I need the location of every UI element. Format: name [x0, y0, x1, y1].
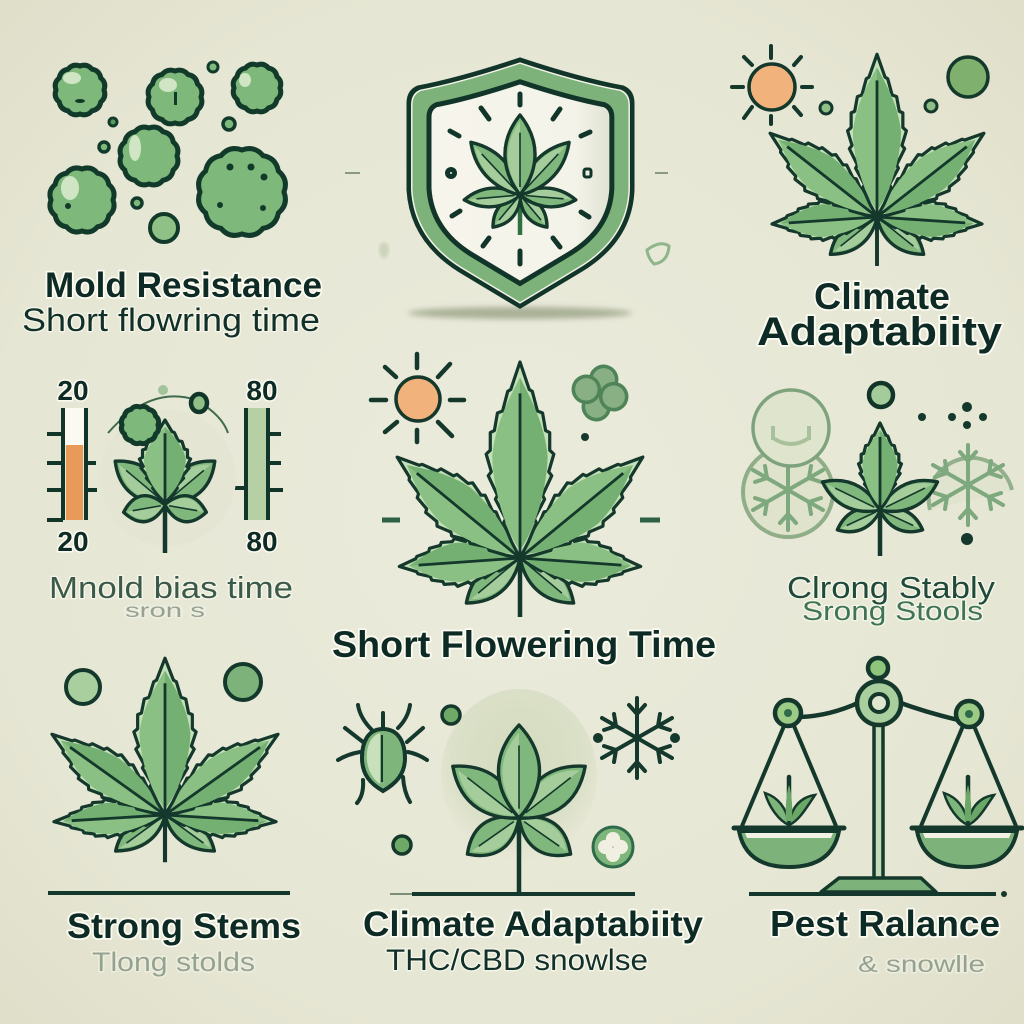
faint caption: Tlong stolds: [92, 947, 255, 977]
heading: Short Flowering Time: [332, 624, 716, 665]
subheading: Srong Stools: [802, 596, 983, 626]
icon: cannabis leaf: [36, 658, 294, 862]
side marks: [382, 518, 660, 522]
ground line: [48, 891, 290, 895]
subheading: Short flowring time: [22, 302, 320, 338]
heading: Climate: [814, 276, 950, 317]
side marks: [345, 173, 669, 264]
icon: sun: [732, 46, 812, 124]
panel: temperature: [47, 375, 293, 622]
panel: short flowering time: [332, 354, 716, 665]
chart: left thermometer: 20: [57, 526, 89, 557]
panel: pest balance: [734, 658, 1022, 977]
icon: spores: [820, 57, 988, 114]
heading: Pest Ralance: [770, 903, 1000, 944]
icon: bug: [338, 705, 427, 803]
icon: large cannabis leaf: [379, 362, 661, 617]
icon: small dots: [869, 383, 987, 545]
icon: clover: [567, 360, 633, 426]
icon: dots: [393, 706, 460, 854]
icon: sun: [371, 354, 464, 442]
icon: plant with bud: [100, 385, 236, 553]
icon: cannabis leaf: [817, 423, 943, 556]
chart: right thermometer: 80: [246, 375, 278, 406]
icon: balance scale: [734, 658, 1022, 897]
heading: [757, 276, 1003, 354]
icon: mold spores: [50, 62, 285, 242]
icon: seedling: [442, 725, 596, 893]
panel: mold resistance: [22, 62, 322, 338]
panel: climate adaptability bottom: [338, 689, 704, 977]
heading: Climate Adaptabiity: [363, 905, 704, 944]
heading: Mold Resistance: [45, 266, 322, 305]
ground line: [390, 892, 635, 896]
glow: [441, 689, 597, 861]
panel: strong stems: [36, 658, 301, 977]
icon: snowflake: [593, 698, 680, 778]
heading: Strong Stems: [67, 907, 301, 946]
faint caption: & snowlle: [858, 951, 985, 977]
subheading: THC/CBD snowlse: [386, 944, 648, 977]
chart: left thermometer: 20: [57, 375, 89, 406]
chart: left thermometer: [47, 375, 97, 557]
small dot: [581, 433, 589, 441]
icon: cannabis leaf: [755, 54, 999, 266]
caption: Mnold bias time: [49, 570, 293, 605]
icon: plant left pan: [765, 777, 815, 825]
chart: right thermometer: [233, 375, 283, 557]
chart: right thermometer: 80: [246, 526, 278, 557]
panel: climate adaptability top: [732, 46, 1003, 354]
faint caption: sron s: [125, 601, 205, 622]
icon: plant right pan: [944, 777, 994, 825]
heading: Adaptabiity: [757, 310, 1003, 354]
shadow: [408, 307, 632, 319]
icon: leaf in shield: [462, 115, 578, 235]
panel: stability: [743, 383, 1012, 626]
heading: Clrong Stably: [787, 570, 996, 605]
icon: circles with snowflakes: [743, 390, 1012, 537]
panel: shield: [345, 60, 669, 319]
icon: spores: [66, 664, 261, 704]
clock ticks: [448, 94, 591, 264]
icon: clover: [593, 827, 633, 867]
icon: shield: [409, 60, 632, 306]
